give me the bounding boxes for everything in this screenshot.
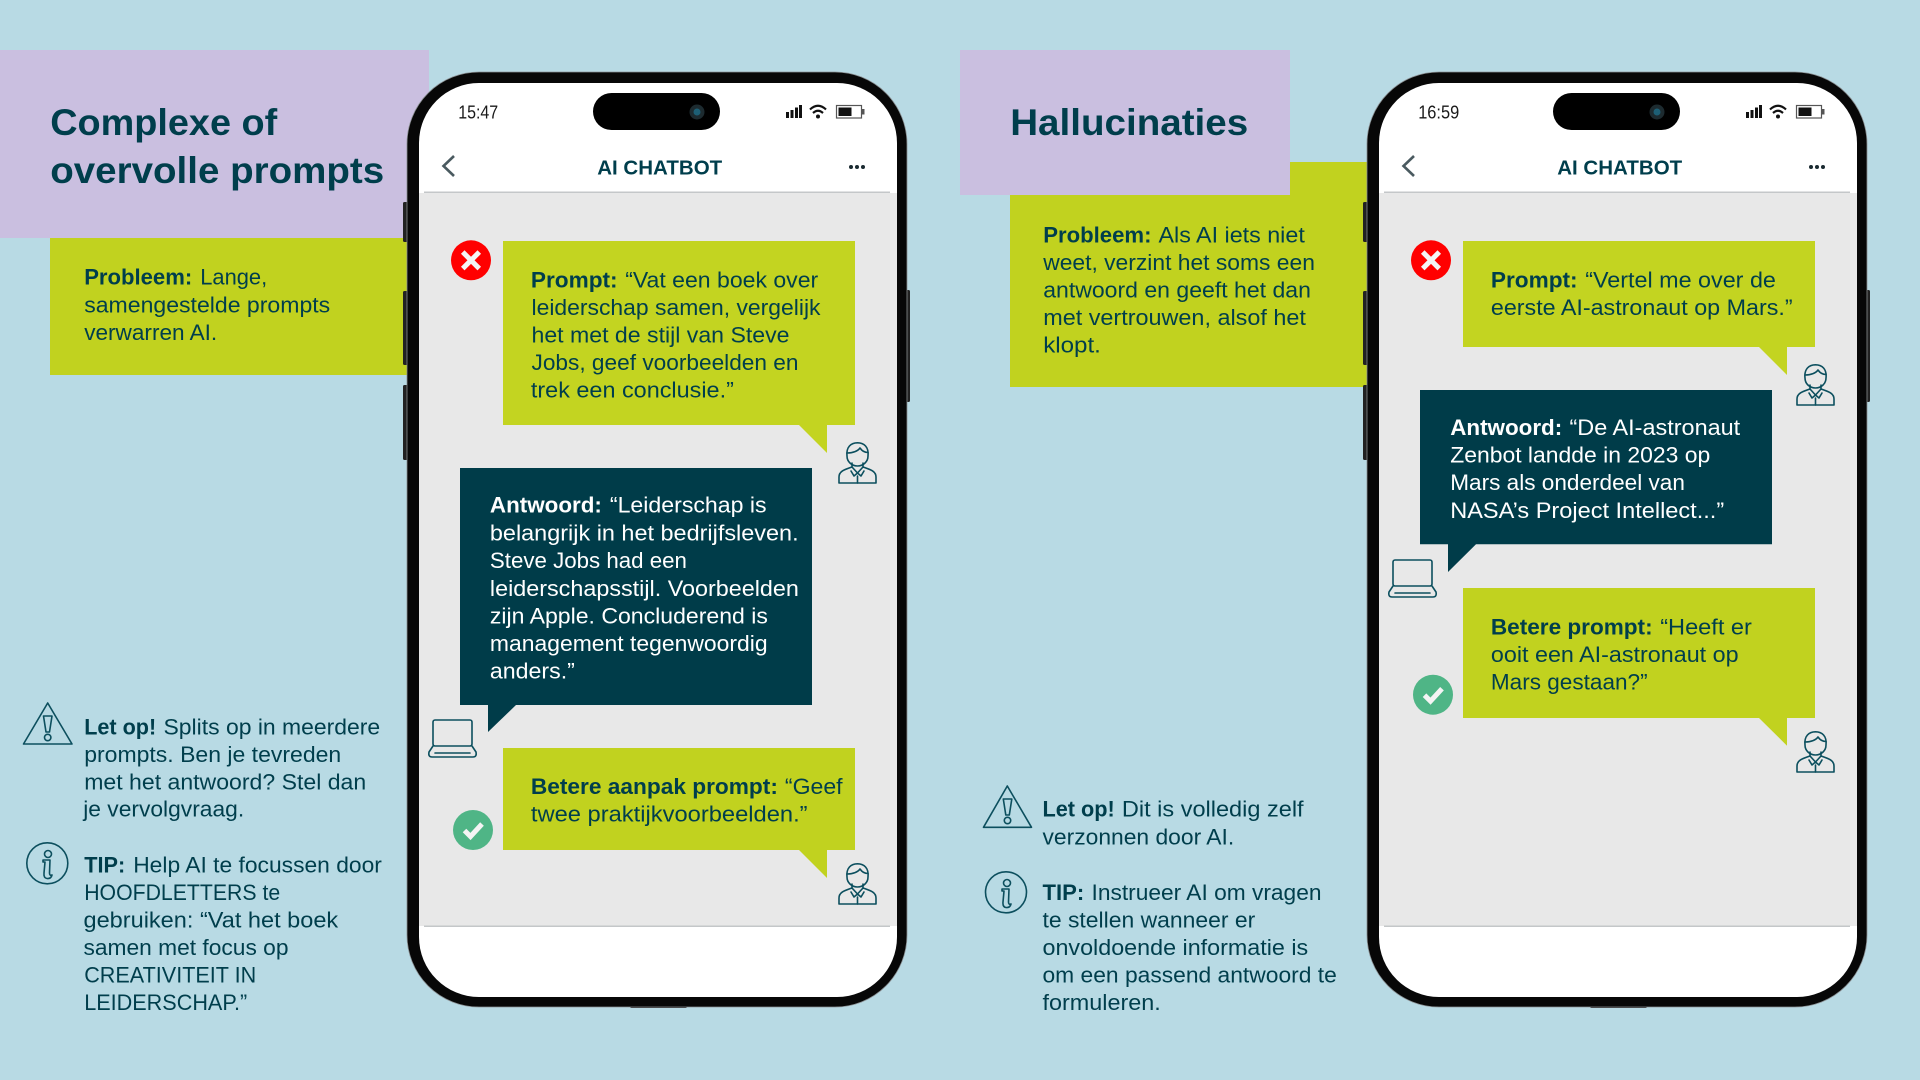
prompt text: “Vertel me over de xyxy=(1585,268,1776,293)
prompt text: eerste AI-astronaut op Mars.” xyxy=(1491,295,1793,320)
text: let op left: prompts. Ben je tevreden xyxy=(84,742,341,767)
answer text: “De AI-astronaut xyxy=(1570,415,1740,440)
text: tip left: Help AI te focussen door xyxy=(133,852,382,877)
better prompt text: ooit een AI-astronaut op xyxy=(1491,642,1739,667)
text: tip middle: te stellen wanneer er xyxy=(1043,908,1255,932)
icon: info left xyxy=(27,843,68,884)
answer text: Antwoord: xyxy=(490,493,602,518)
prompt text: het met de stijl van Steve xyxy=(531,323,789,348)
text: tip middle: onvoldoende informatie is xyxy=(1043,935,1308,960)
better prompt text: Mars gestaan?” xyxy=(1491,669,1648,694)
problem text: Lange, xyxy=(200,264,267,289)
answer text: zijn Apple. Concluderend is xyxy=(490,603,768,628)
icon: wrong cross xyxy=(1411,240,1451,280)
problem text: Probleem: xyxy=(84,264,192,289)
problem text: met vertrouwen, alsof het xyxy=(1043,305,1306,330)
bubble: better prompt xyxy=(503,748,855,878)
problem text: verwarren AI. xyxy=(84,320,217,345)
answer text: belangrijk in het bedrijfsleven. xyxy=(490,521,799,546)
icon: laptop xyxy=(429,720,476,757)
dynamic island xyxy=(1553,93,1680,130)
heading: Complexe of xyxy=(50,101,278,143)
icon: user xyxy=(1797,732,1834,772)
prompt text: trek een conclusie.” xyxy=(531,378,734,403)
icon: correct check xyxy=(1413,675,1453,715)
text: tip left: gebruiken: “Vat het boek xyxy=(83,907,339,932)
icon: user xyxy=(839,864,876,904)
panel: probleem left xyxy=(50,238,410,375)
answer text: Mars als onderdeel van xyxy=(1450,470,1685,495)
chat title: AI CHATBOT xyxy=(597,157,722,179)
problem text: weet, verzint het soms een xyxy=(1042,250,1315,275)
phone right xyxy=(1363,72,1870,1008)
prompt text: Jobs, geef voorbeelden en xyxy=(531,350,798,375)
icon: menu dots xyxy=(849,165,865,169)
prompt text: Prompt: xyxy=(1491,268,1578,293)
text: let op left: je vervolgvraag. xyxy=(82,797,244,822)
answer text: Antwoord: xyxy=(1450,415,1562,440)
text: tip middle: Instrueer AI om vragen xyxy=(1092,880,1322,905)
bubble: better prompt xyxy=(1463,588,1815,746)
status icons xyxy=(786,105,864,118)
text: let op left: Let op! xyxy=(84,714,156,739)
text: tip middle: formuleren. xyxy=(1043,990,1161,1015)
icon: user xyxy=(839,443,876,483)
answer text: management tegenwoordig xyxy=(490,631,768,656)
answer text: “Leiderschap is xyxy=(610,493,767,518)
answer text: Steve Jobs had een xyxy=(490,548,687,573)
better prompt text: Betere aanpak prompt: xyxy=(531,774,778,799)
icon: wrong cross xyxy=(451,240,491,280)
problem text: Probleem: xyxy=(1043,222,1152,247)
problem text: klopt. xyxy=(1043,332,1101,357)
heading: Hallucinaties xyxy=(1010,101,1248,143)
prompt text: “Vat een boek over xyxy=(625,268,818,293)
icon: back chevron xyxy=(444,156,454,176)
status icons xyxy=(1746,105,1824,118)
panel: probleem middle xyxy=(1010,162,1370,387)
problem text: antwoord en geeft het dan xyxy=(1043,277,1311,302)
better prompt text: “Heeft er xyxy=(1660,614,1752,639)
problem text: Als AI iets niet xyxy=(1159,222,1305,247)
icon: info middle xyxy=(986,872,1026,913)
panel: title Hallucinaties xyxy=(960,50,1290,195)
answer text: Zenbot landde in 2023 op xyxy=(1450,442,1710,468)
text: tip left: LEIDERSCHAP.” xyxy=(84,990,247,1015)
prompt text: Prompt: xyxy=(531,268,618,293)
text: tip left: samen met focus op xyxy=(83,935,288,960)
icon: warning triangle left xyxy=(24,703,72,744)
icon: back chevron xyxy=(1404,156,1414,176)
icon: user xyxy=(1797,365,1834,405)
answer text: leiderschapsstijl. Voorbeelden xyxy=(490,576,799,601)
text: tip left: TIP: xyxy=(84,852,125,877)
answer text: anders.” xyxy=(490,658,575,683)
panel: title Complexe of overvolle prompts xyxy=(0,50,429,238)
better prompt text: twee praktijkvoorbeelden.” xyxy=(531,802,808,827)
heading: overvolle prompts xyxy=(50,149,384,191)
prompt text: leiderschap samen, vergelijk xyxy=(531,295,822,320)
text: tip left: HOOFDLETTERS te xyxy=(84,880,280,905)
text: let op left: Splits op in meerdere xyxy=(164,714,380,739)
text: let op middle: verzonnen door AI. xyxy=(1043,824,1234,849)
phone frame left xyxy=(403,72,910,1008)
better prompt text: “Geef xyxy=(785,774,844,799)
phone left xyxy=(403,72,910,1008)
chat title: AI CHATBOT xyxy=(1557,157,1682,179)
bubble: prompt xyxy=(503,241,855,453)
phone frame right xyxy=(1363,72,1870,1008)
icon: laptop xyxy=(1389,560,1436,597)
text: tip left: CREATIVITEIT IN xyxy=(84,962,256,987)
dynamic island xyxy=(593,93,720,130)
icon: warning triangle middle xyxy=(984,786,1032,827)
icon: correct check xyxy=(453,810,493,850)
text: let op middle: Dit is volledig zelf xyxy=(1122,797,1305,822)
status time: 15:47 xyxy=(458,102,498,122)
answer text: NASA’s Project Intellect...” xyxy=(1450,498,1724,523)
icon: menu dots xyxy=(1809,165,1825,169)
text: let op left: met het antwoord? Stel dan xyxy=(84,769,366,794)
bubble: prompt xyxy=(1463,241,1815,375)
text: tip middle: TIP: xyxy=(1043,880,1084,905)
text: let op middle: Let op! xyxy=(1043,797,1115,822)
text: tip middle: om een passend antwoord te xyxy=(1043,962,1337,988)
status time: 16:59 xyxy=(1418,102,1459,122)
problem text: samengestelde prompts xyxy=(84,292,330,317)
bubble: answer xyxy=(460,468,812,732)
bubble: answer xyxy=(1420,390,1772,572)
better prompt text: Betere prompt: xyxy=(1491,614,1653,639)
